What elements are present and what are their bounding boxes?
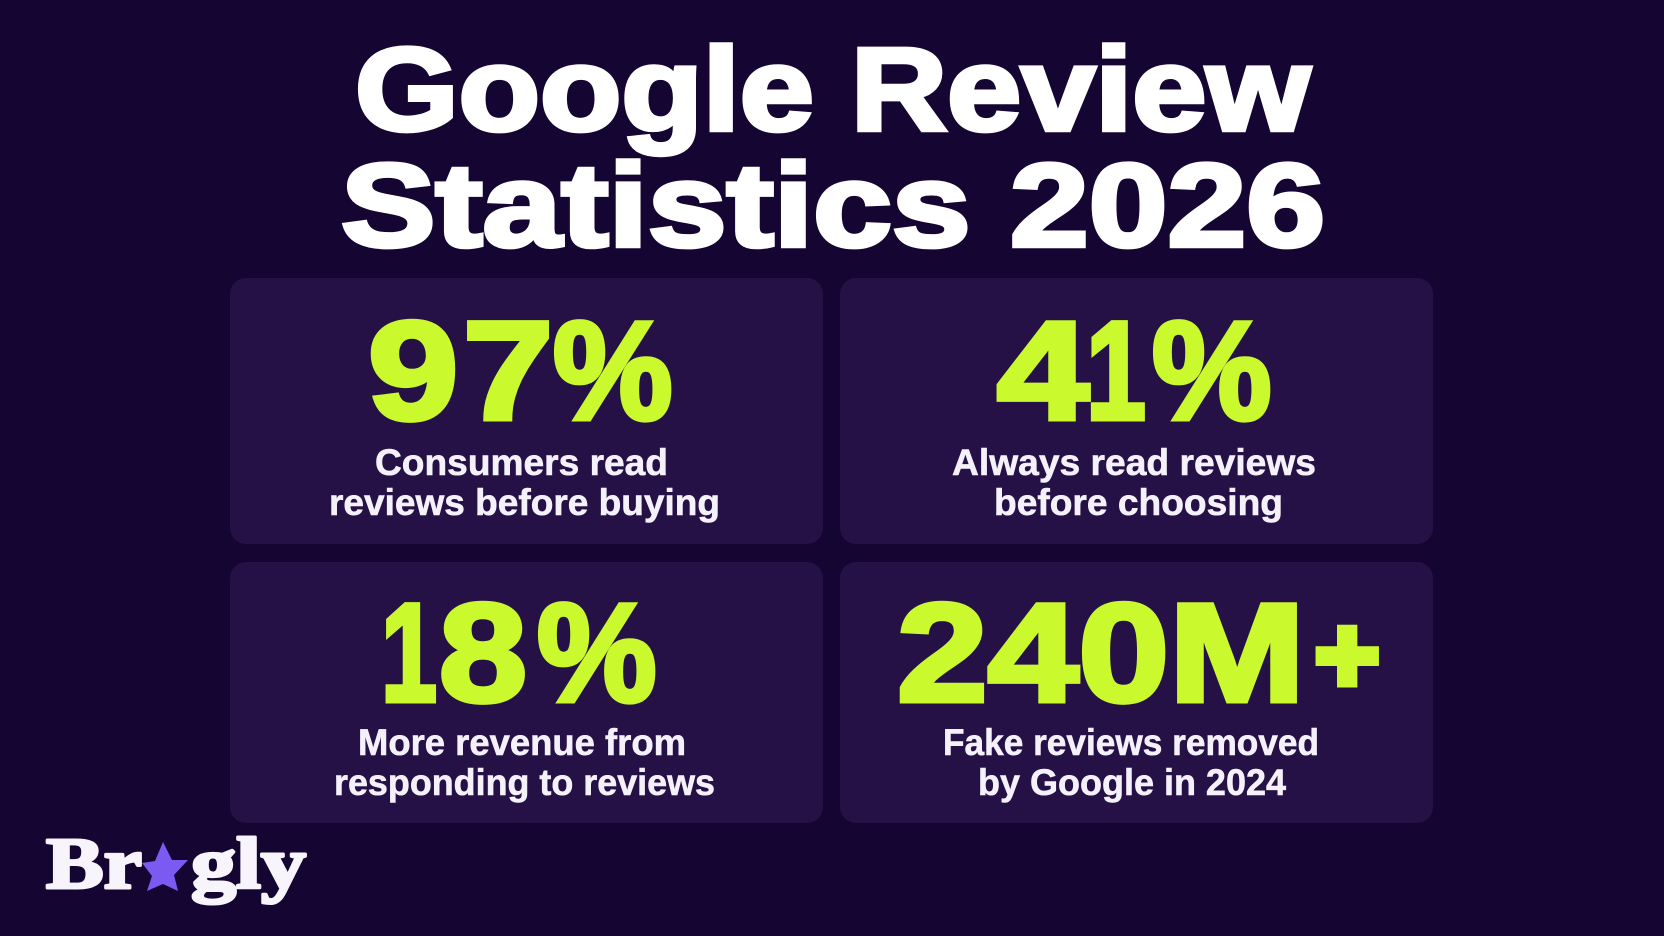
label: always read reviews before choosing [952, 442, 1316, 523]
icon: purple star [142, 842, 188, 891]
label: always read reviews before choosing: Always read reviews [952, 442, 1316, 483]
label: consumers read reviews before buying [329, 442, 720, 523]
title [341, 24, 1325, 272]
stat: 18% [381, 574, 657, 732]
label: consumers read reviews before buying: reviews before buying [329, 482, 720, 523]
logo: Brogly wordmark [46, 823, 306, 904]
stat: 18%: 8 [439, 574, 527, 731]
label: more revenue from responding to reviews: responding to reviews [334, 762, 715, 803]
label: always read reviews before choosing: before choosing [994, 482, 1283, 523]
label: fake reviews removed by Google in 2024 [943, 722, 1319, 803]
stat: 41%: 4 [997, 293, 1089, 449]
stat: 41%: % [1152, 294, 1272, 450]
panel: 41% always read reviews [840, 278, 1433, 544]
panel: 97% consumers read reviews [230, 278, 823, 544]
label: fake reviews removed by Google in 2024: Fake reviews removed [943, 722, 1319, 763]
label: more revenue from responding to reviews: More revenue from [358, 722, 686, 763]
stat: 240M+: + [1315, 595, 1379, 716]
logo: Brogly wordmark: Br [46, 823, 142, 904]
stat: 18%: % [537, 576, 657, 732]
label: fake reviews removed by Google in 2024: by Google in 2024 [978, 762, 1286, 803]
label: consumers read reviews before buying: Consumers read [375, 442, 668, 483]
stat: 240M+: 240M [897, 575, 1305, 731]
stat: 41%: 1 [1086, 294, 1146, 449]
title: Statistics 2026 [341, 140, 1325, 272]
panel: 240M+ fake reviews removed [840, 562, 1433, 823]
label: more revenue from responding to reviews [334, 722, 715, 803]
stat: 97%: 97 [368, 293, 558, 449]
stat: 18%: 1 [381, 575, 437, 731]
logo: Brogly wordmark: gly [191, 823, 306, 904]
stat: 97% [368, 293, 673, 450]
stat: 97%: % [553, 294, 673, 450]
title: Google Review [355, 24, 1311, 156]
stat: 41% [997, 293, 1272, 450]
panel: 18% more revenue [230, 562, 823, 823]
